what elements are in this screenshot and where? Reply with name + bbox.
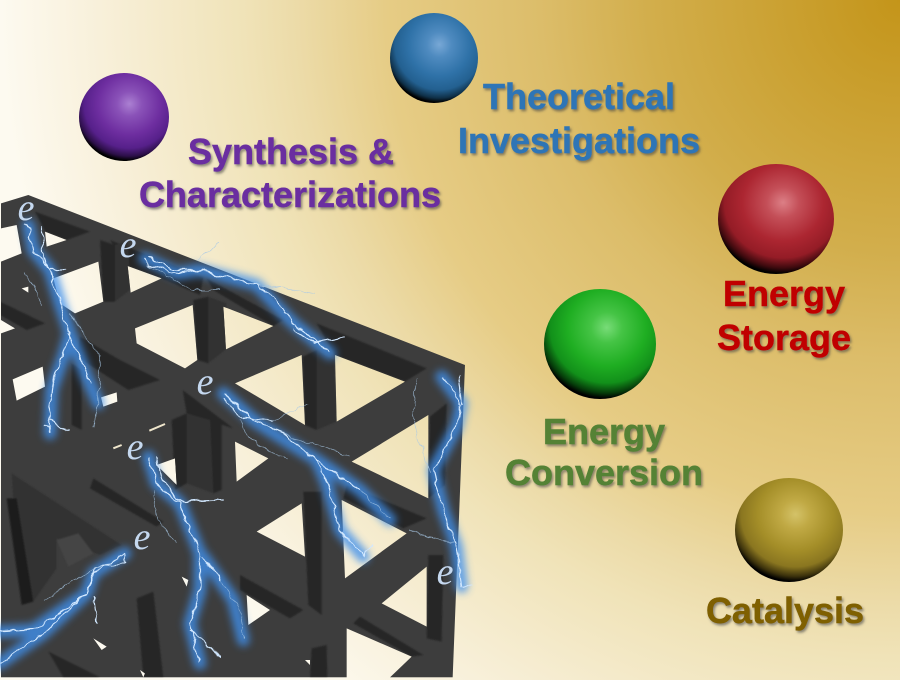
label: Theoretical Investigations: Investigations [458, 120, 700, 161]
faint lightning branches [27, 243, 457, 640]
label: Synthesis & Characterizations [139, 131, 441, 215]
sphere: energy storage (red) [718, 164, 834, 274]
label: Energy Storage: Storage [717, 317, 851, 358]
label: Energy Storage [717, 273, 851, 358]
electron labels: e [127, 426, 144, 468]
electron labels: e [120, 224, 137, 266]
lightning glow [0, 225, 462, 663]
electron labels: e [437, 551, 454, 593]
sphere: synthesis (purple) [79, 73, 169, 161]
label: Theoretical Investigations [458, 76, 700, 161]
electron labels: e [197, 361, 214, 403]
lattice bars [0, 190, 467, 680]
electron labels: e [18, 187, 35, 229]
lightning bolts [0, 225, 472, 663]
sphere: theoretical (blue) [390, 13, 478, 103]
electron labels: e [134, 516, 151, 558]
electron labels [18, 187, 454, 593]
label: Energy Conversion: Energy [543, 411, 665, 452]
label: Energy Storage: Energy [723, 273, 845, 314]
label: Energy Conversion: Conversion [505, 452, 703, 493]
lattice scaffold with lightning [0, 190, 472, 680]
sphere: energy conversion (green) [544, 289, 656, 399]
label: Synthesis & Characterizations: Synthesis & [188, 131, 394, 172]
sphere: catalysis (olive) [735, 478, 843, 582]
label: Catalysis: Catalysis [706, 590, 864, 631]
label: Synthesis & Characterizations: Characterizations [139, 174, 441, 215]
label: Energy Conversion [505, 411, 703, 493]
light slits in lattice [113, 424, 165, 448]
label: Theoretical Investigations: Theoretical [483, 76, 675, 117]
